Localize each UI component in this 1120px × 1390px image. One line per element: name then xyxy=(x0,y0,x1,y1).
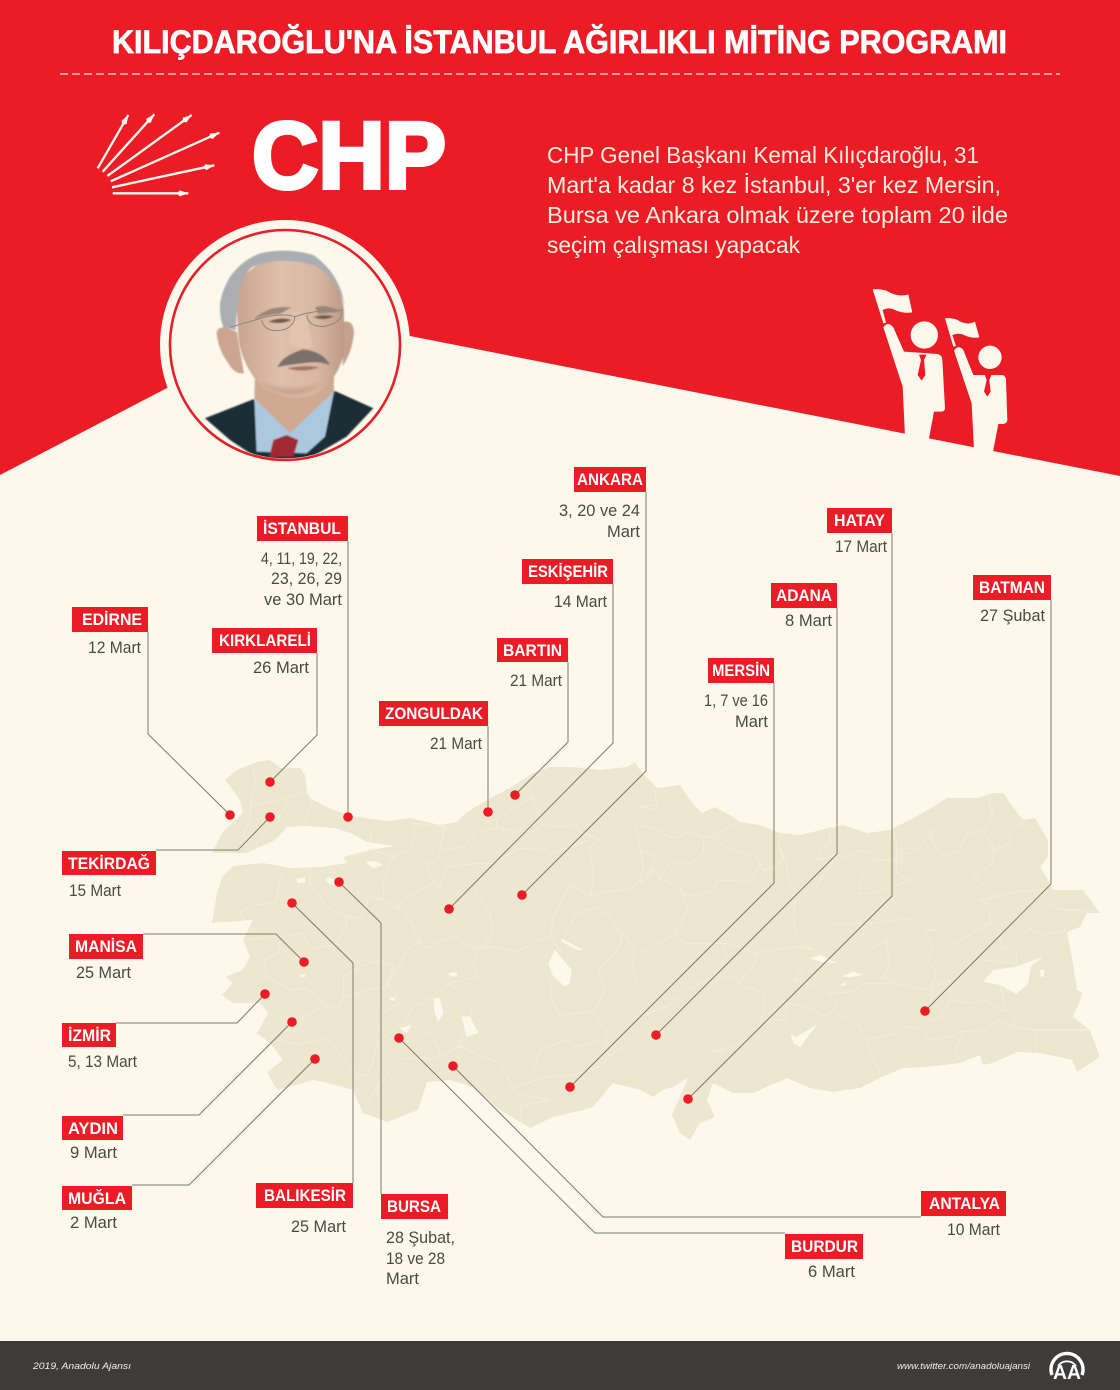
label: Balıkesir: BALIKESİR xyxy=(264,1186,346,1205)
label: Bursa: 18 ve 28 xyxy=(386,1250,445,1268)
label: Bartın: 21 Mart xyxy=(510,672,562,690)
label: Manisa: 25 Mart xyxy=(76,964,131,982)
label: Zonguldak xyxy=(379,701,488,753)
label: Mersin xyxy=(704,658,774,731)
label: Mersin: 1, 7 ve 16 xyxy=(704,692,768,710)
label: Bursa: 28 Şubat, xyxy=(386,1229,455,1247)
icon: Anadolu Agency logo: AA xyxy=(1053,1362,1081,1384)
label: Aydın: 9 Mart xyxy=(70,1144,117,1162)
description text: CHP Genel Başkanı Kemal Kılıçdaroğlu, 31 xyxy=(547,142,979,168)
label: Muğla xyxy=(62,1186,132,1232)
label: Kırklareli xyxy=(212,628,317,677)
description text: seçim çalışması yapacak xyxy=(547,232,800,258)
label: İstanbul: 4, 11, 19, 22, xyxy=(261,550,342,568)
label: Eskişehir xyxy=(522,559,613,611)
city location dots xyxy=(225,777,930,1104)
label: Manisa xyxy=(69,934,143,982)
label: Ankara: Mart xyxy=(607,523,640,541)
label: Kırklareli: KIRKLARELİ xyxy=(219,631,311,650)
label: Ankara: 3, 20 ve 24 xyxy=(559,502,640,520)
label: İstanbul: İSTANBUL xyxy=(263,519,341,538)
province borders, west xyxy=(240,767,660,1127)
footer bar xyxy=(0,1341,1120,1390)
man with flag, right xyxy=(945,318,1007,453)
land mass xyxy=(212,760,1100,1140)
label: Eskişehir: ESKİŞEHİR xyxy=(528,562,608,581)
leader lines xyxy=(116,492,1051,1233)
label: Edirne: EDİRNE xyxy=(82,610,142,629)
label: Aydın: AYDIN xyxy=(68,1119,118,1138)
label: Batman: 27 Şubat xyxy=(980,607,1045,625)
label: Edirne xyxy=(72,607,148,657)
lakes and islands, west xyxy=(297,862,583,1037)
label: İzmir: 5, 13 Mart xyxy=(68,1053,137,1071)
label: Batman xyxy=(973,575,1051,625)
label: Adana: 8 Mart xyxy=(785,612,832,630)
label: Adana: ADANA xyxy=(776,586,832,605)
footer twitter url: www.twitter.com/anadoluajansi xyxy=(897,1361,1031,1372)
label: Manisa: MANİSA xyxy=(75,937,137,956)
label: Mersin: MERSİN xyxy=(712,661,770,680)
label: Burdur xyxy=(785,1234,863,1281)
label: Muğla: 2 Mart xyxy=(70,1214,117,1232)
label: Ankara: ANKARA xyxy=(577,470,643,489)
label: Batman: BATMAN xyxy=(979,578,1045,597)
label: Bursa xyxy=(381,1194,455,1288)
description text: Mart'a kadar 8 kez İstanbul, 3'er kez Mersin, xyxy=(547,172,1001,198)
label: Bursa: BURSA xyxy=(387,1197,441,1216)
label: Mersin: Mart xyxy=(735,713,768,731)
label: Bartın xyxy=(497,638,568,690)
label: İzmir: İZMİR xyxy=(68,1026,111,1045)
province borders, east xyxy=(640,790,1090,1073)
label: Burdur: BURDUR xyxy=(791,1237,858,1256)
label: İstanbul: ve 30 Mart xyxy=(264,591,342,609)
label: Kırklareli: 26 Mart xyxy=(253,659,309,677)
label: Antalya xyxy=(921,1191,1006,1239)
label: Edirne: 12 Mart xyxy=(88,639,141,657)
man with flag, left xyxy=(873,289,945,440)
label: Zonguldak: ZONGULDAK xyxy=(385,704,484,723)
description text xyxy=(547,142,1008,258)
icon: two men waving flags xyxy=(873,289,1007,453)
label: Eskişehir: 14 Mart xyxy=(554,593,607,611)
lake Van xyxy=(983,957,1043,994)
icon: Anadolu Agency logo xyxy=(1051,1353,1083,1384)
label: Bursa: Mart xyxy=(386,1270,419,1288)
portrait: Kemal Kılıçdaroğlu xyxy=(205,251,373,460)
label: Burdur: 6 Mart xyxy=(808,1263,855,1281)
label: Tekirdağ: TEKİRDAĞ xyxy=(68,854,150,873)
label: Antalya: 10 Mart xyxy=(947,1221,1000,1239)
label: Tekirdağ xyxy=(62,851,156,900)
label: Adana xyxy=(771,583,837,630)
label: Antalya: ANTALYA xyxy=(929,1194,1000,1213)
label: Aydın xyxy=(62,1116,123,1162)
label: Hatay: HATAY xyxy=(834,511,886,530)
red header band xyxy=(0,0,1120,476)
map of Turkey xyxy=(212,760,1100,1140)
label: Balıkesir: 25 Mart xyxy=(291,1218,346,1236)
portrait medallion xyxy=(160,220,410,470)
label: Hatay xyxy=(827,508,892,556)
CHP wordmark: CHP xyxy=(252,103,446,209)
label: Muğla: MUĞLA xyxy=(68,1189,126,1208)
label: İzmir xyxy=(62,1023,137,1071)
footer credit: 2019, Anadolu Ajansı xyxy=(32,1361,131,1372)
title: KILIÇDAROĞLU'NA İSTANBUL AĞIRLIKLI MİTİNG PROGRAMI xyxy=(112,24,1007,60)
label: Tekirdağ: 15 Mart xyxy=(69,882,121,900)
label: Balıkesir xyxy=(256,1183,353,1236)
label: Bartın: BARTIN xyxy=(503,641,562,660)
description text: Bursa ve Ankara olmak üzere toplam 20 ilde xyxy=(547,202,1008,228)
icon: CHP six arrows xyxy=(98,114,219,193)
label: Hatay: 17 Mart xyxy=(835,538,887,556)
label: Zonguldak: 21 Mart xyxy=(430,735,482,753)
label: İstanbul: 23, 26, 29 xyxy=(271,570,342,588)
label: Ankara xyxy=(559,467,646,541)
label: İstanbul xyxy=(257,516,348,609)
